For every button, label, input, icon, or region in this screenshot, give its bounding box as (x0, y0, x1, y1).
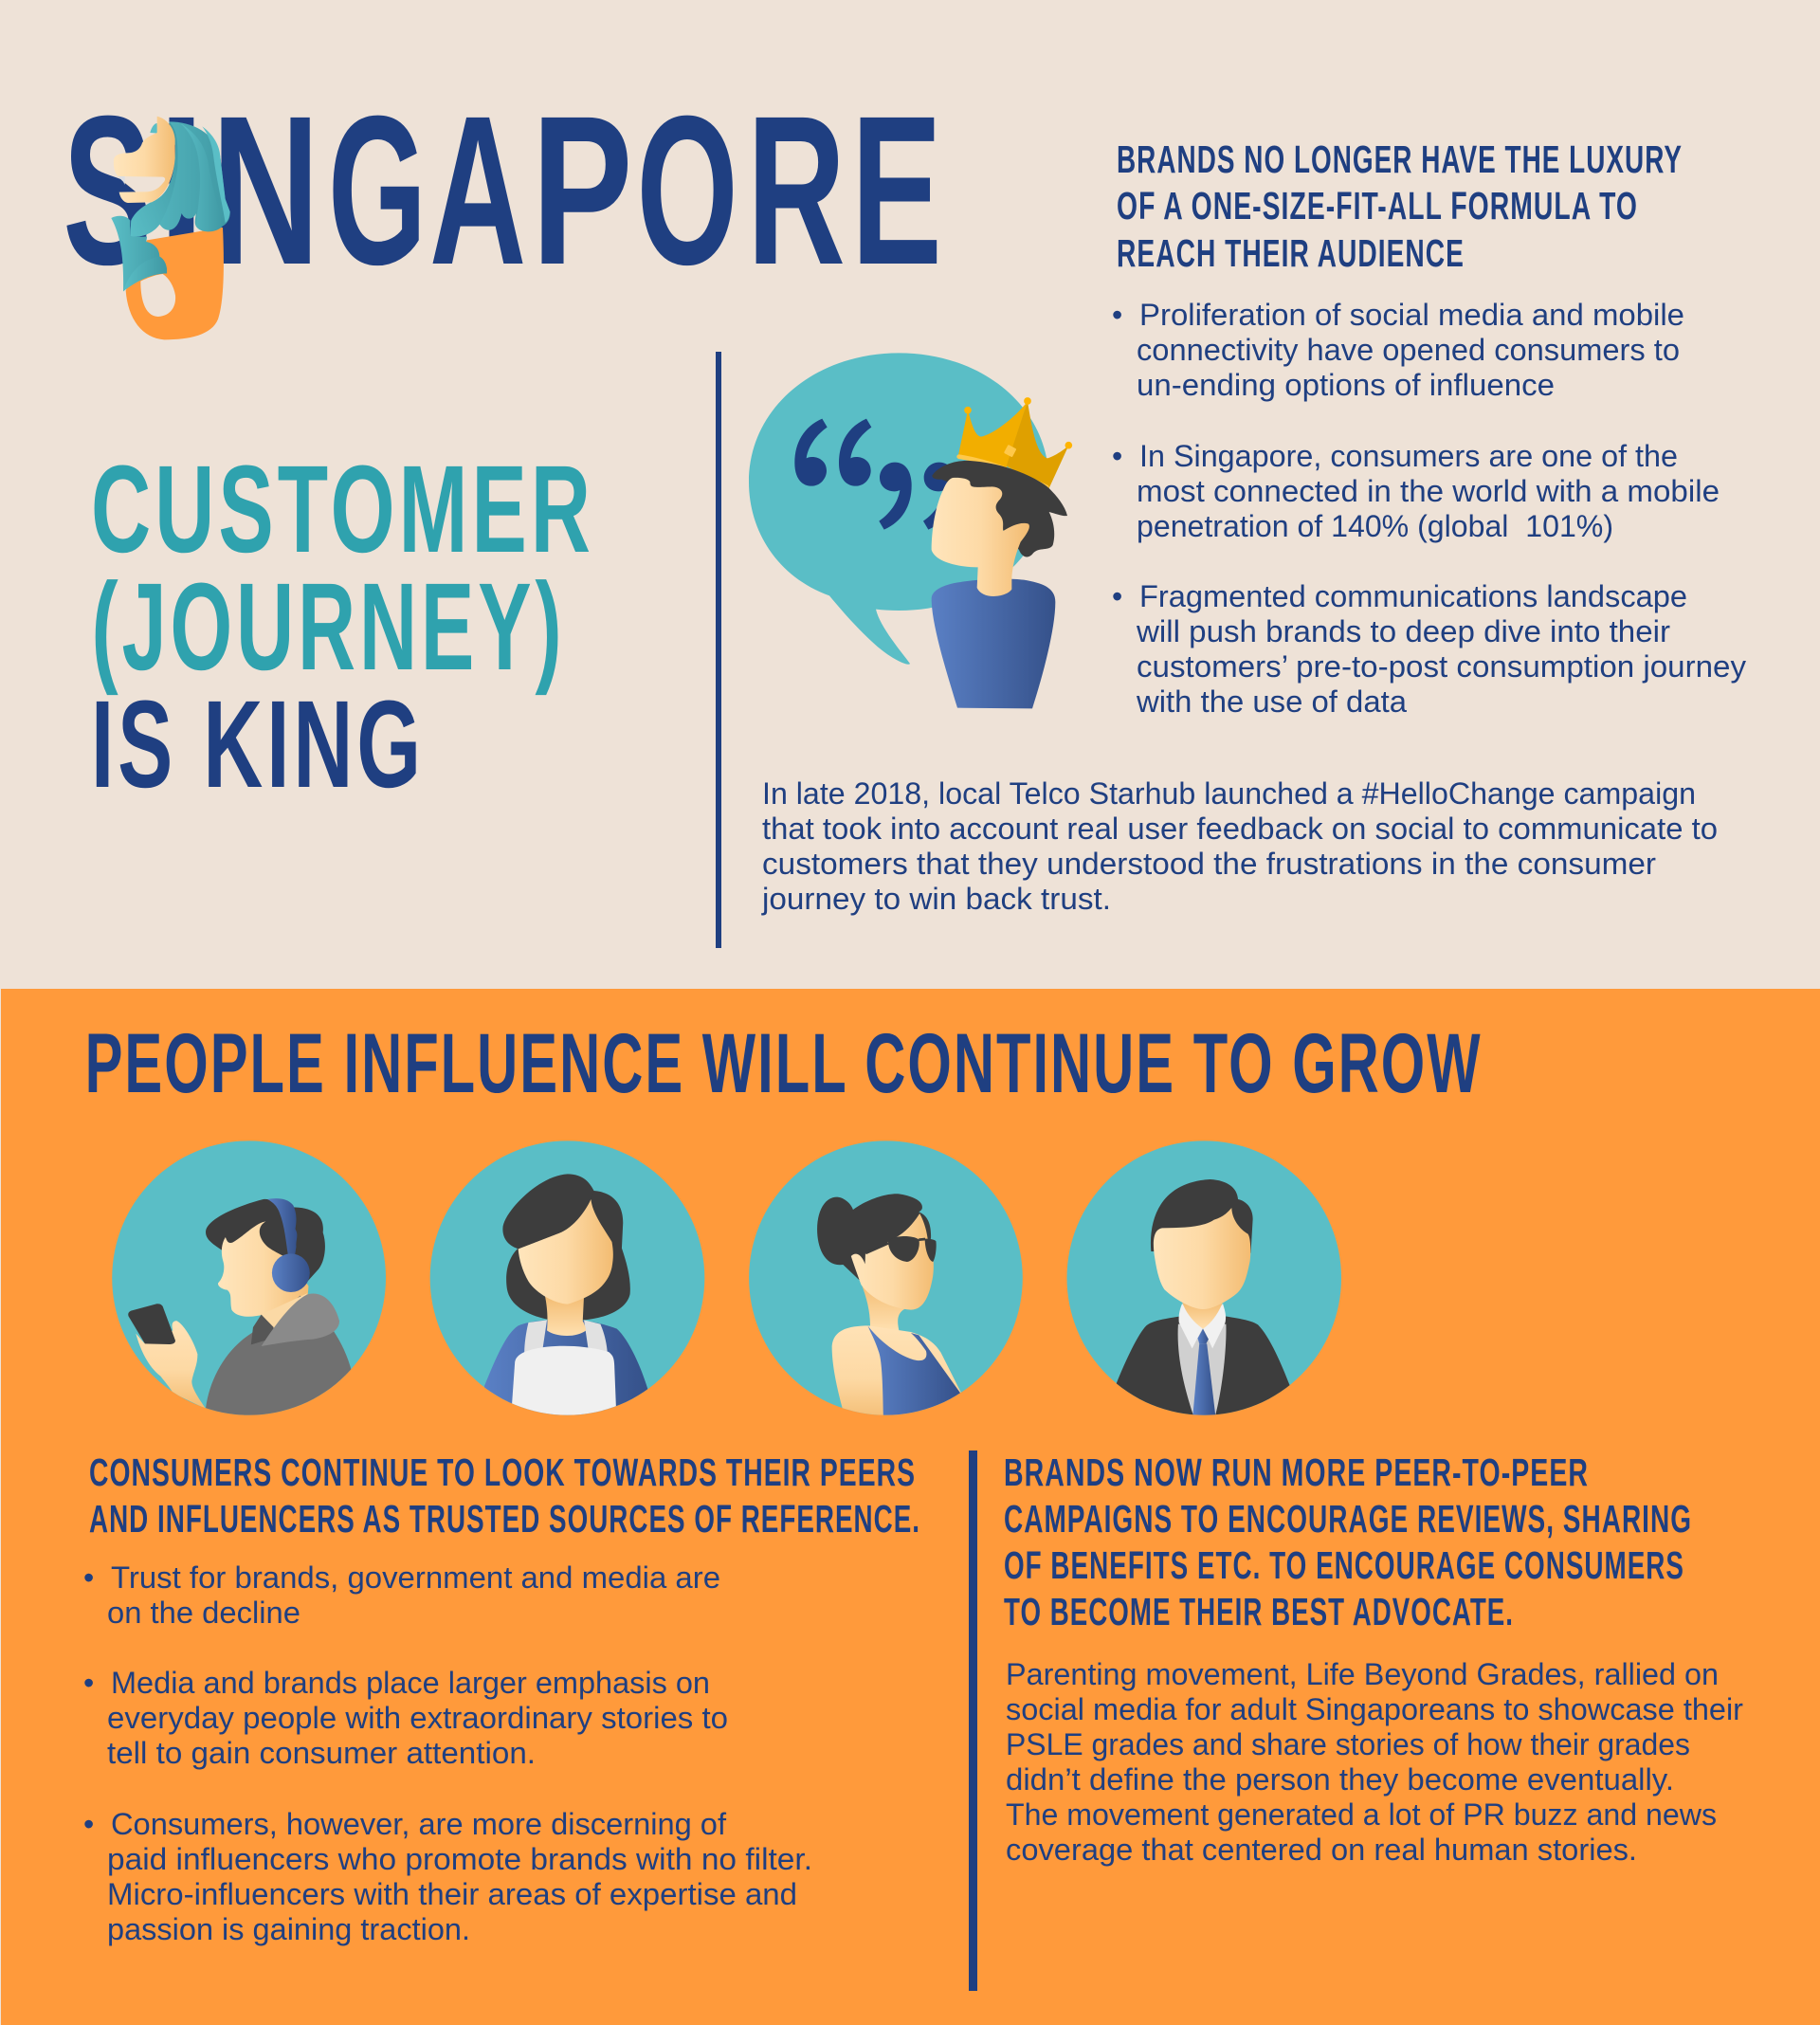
heading: customer journey is king: IS KING (91, 674, 425, 813)
text: Life Beyond Grades paragraph (1006, 1657, 1743, 1867)
title: SINGAPORE: S (63, 71, 153, 309)
text: left bullet 3: passion is gaining traction. (107, 1912, 470, 1946)
text: bullet 2: penetration of 140% (global 101%) (1137, 509, 1613, 543)
text: Starhub paragraph: In late 2018, local Telco Starhub launched a #HelloChange campaign (762, 776, 1696, 811)
heading: consumers trusted sources: CONSUMERS CONTINUE TO LOOK TOWARDS THEIR PEERS (89, 1450, 916, 1494)
panel: beige top background (0, 0, 1820, 989)
text: right heading (1117, 137, 1683, 275)
text: bullet 3: with the use of data (1136, 684, 1407, 719)
body (932, 579, 1055, 708)
text: left bullet 3: paid influencers who promote brands with no filter. (107, 1842, 812, 1876)
crown (958, 397, 1072, 488)
title: SINGAPORE: I (157, 71, 205, 308)
text: bullet 3: will push brands to deep dive into their (1136, 614, 1670, 648)
heading: customer journey is king: (JOURNEY) (91, 556, 565, 696)
text: left bullet 2: tell to gain consumer attention. (107, 1736, 536, 1770)
text: Starhub paragraph (761, 776, 1718, 916)
text: Life Beyond Grades paragraph: didn’t define the person they become eventually. (1006, 1762, 1674, 1797)
icon: woman with sunglasses (749, 1140, 1023, 1422)
heading: brands peer-to-peer: TO BECOME THEIR BEST ADVOCATE. (1004, 1590, 1514, 1633)
text: Life Beyond Grades paragraph: Parenting movement, Life Beyond Grades, rallied on (1006, 1657, 1719, 1691)
text: right heading: REACH THEIR AUDIENCE (1117, 231, 1465, 275)
text: bullet 2 (1112, 439, 1720, 543)
speech bubble (749, 353, 1049, 665)
text: Life Beyond Grades paragraph: coverage that centered on real human stories. (1006, 1833, 1637, 1867)
text: left bullet 1 (83, 1560, 720, 1630)
text: left bullet 3: Micro-influencers with their areas of expertise and (107, 1877, 797, 1911)
icon: merlion (111, 117, 230, 339)
text: bullet 2: In Singapore, consumers are one of the (1139, 439, 1678, 473)
title: SINGAPORE: G (328, 72, 427, 310)
text: bullet 2: most connected in the world with a mobile (1137, 474, 1720, 508)
title: SINGAPORE: O (637, 73, 738, 309)
text: left bullet 1: Trust for brands, government and media are (111, 1560, 720, 1595)
text: left bullet 2: • (83, 1666, 94, 1700)
text: Life Beyond Grades paragraph: PSLE grades and share stories of how their grades (1006, 1727, 1690, 1761)
text: left bullet 3: Consumers, however, are more discerning of (111, 1807, 726, 1841)
icon: speech bubble with quotes and crowned man (749, 353, 1072, 708)
divider: lower section (969, 1450, 977, 1991)
text: bullet 1 (1112, 298, 1684, 402)
text: left bullet 1: on the decline (107, 1596, 300, 1630)
title: SINGAPORE: R (747, 72, 846, 309)
text: bullet 2: • (1112, 439, 1122, 473)
text: left bullet 3 (83, 1807, 812, 1946)
text: bullet 3: customers’ pre-to-post consumption journey (1137, 649, 1746, 684)
heading: consumers trusted sources: AND INFLUENCERS AS TRUSTED SOURCES OF REFERENCE. (89, 1497, 920, 1541)
heading: brands peer-to-peer (1004, 1450, 1692, 1633)
text: left bullet 2: everyday people with extraordinary stories to (107, 1701, 728, 1735)
panel: orange lower background (1, 989, 1820, 2025)
text: bullet 1: • (1112, 298, 1122, 332)
title: SINGAPORE: N (211, 72, 319, 309)
title: SINGAPORE (63, 71, 942, 310)
text: bullet 3 (1112, 579, 1746, 719)
text: bullet 3: • (1112, 579, 1122, 613)
divider: top section (716, 352, 721, 948)
text: Life Beyond Grades paragraph: The movement generated a lot of PR buzz and news (1006, 1797, 1717, 1832)
text: bullet 1: connectivity have opened consumers to (1137, 333, 1680, 367)
face (932, 478, 1029, 596)
text: left bullet 2 (83, 1666, 728, 1770)
icon: woman with apron (430, 1140, 704, 1422)
icon: man in suit (1067, 1140, 1341, 1422)
text: bullet 1: un-ending options of influence (1137, 368, 1555, 402)
text: bullet 1: Proliferation of social media and mobile (1139, 298, 1684, 332)
text: Life Beyond Grades paragraph: social media for adult Singaporeans to showcase their (1006, 1692, 1743, 1726)
text: Starhub paragraph: customers that they understood the frustrations in the consumer (762, 847, 1656, 881)
heading: customer journey is king: CUSTOMER (91, 439, 594, 578)
text: left bullet 1: • (83, 1560, 94, 1595)
text: left bullet 3: • (83, 1807, 94, 1841)
icon: man with headphones and phone (112, 1140, 386, 1422)
text: left bullet 2: Media and brands place larger emphasis on (111, 1666, 710, 1700)
heading: customer journey is king (91, 439, 594, 813)
text: Starhub paragraph: journey to win back trust. (761, 882, 1111, 916)
quotation marks (794, 419, 956, 530)
hair (932, 461, 1067, 556)
text: bullet 3: Fragmented communications landscape (1139, 579, 1687, 613)
title: SINGAPORE: A (429, 71, 526, 309)
title: SINGAPORE: E (851, 72, 942, 309)
title: SINGAPORE: P (532, 73, 632, 309)
heading: consumers trusted sources (89, 1450, 920, 1541)
text: Starhub paragraph: that took into account real user feedback on social to communicate to (762, 812, 1718, 846)
